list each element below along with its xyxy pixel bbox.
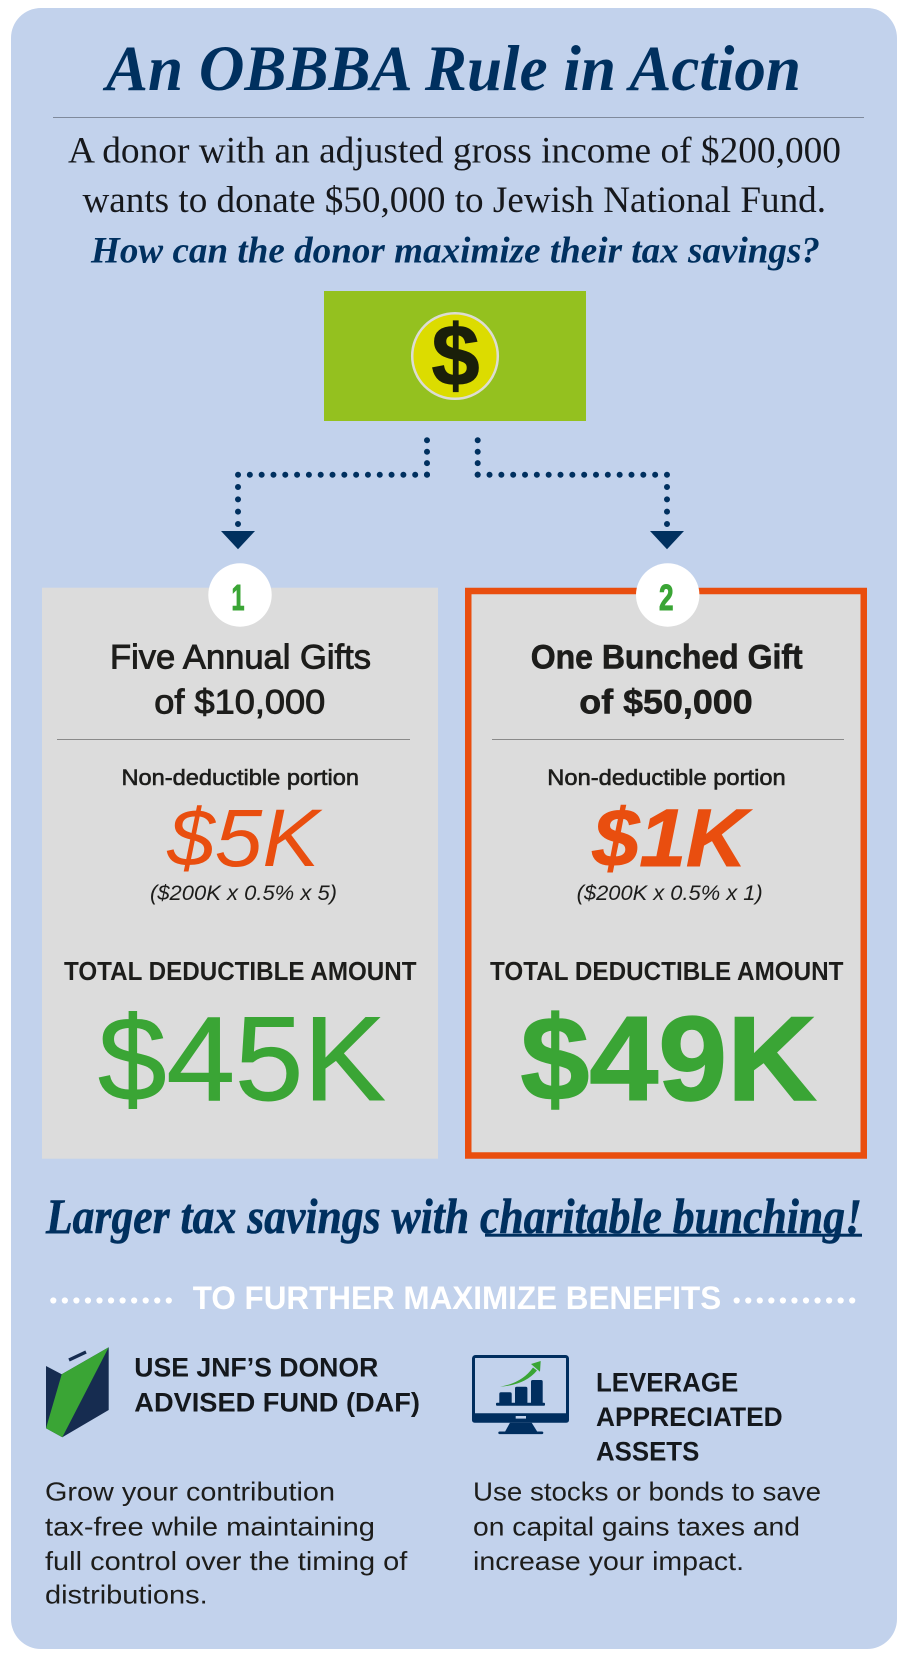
- heading: five annual gifts: of $10,000: [154, 683, 325, 721]
- heading: one bunched gift: [531, 638, 803, 721]
- intro text: wants to donate $50,000 to Jewish National Fund.: [82, 180, 826, 221]
- text: DAF description: full control over the timing of: [45, 1546, 408, 1576]
- title: An OBBBA Rule in Action: [102, 33, 801, 105]
- heading: five annual gifts: [110, 638, 371, 721]
- label: total deductible amount: TOTAL DEDUCTIBLE AMOUNT: [490, 958, 844, 986]
- value: $1K: $1K: [592, 793, 753, 884]
- text: DAF description: tax-free while maintaining: [45, 1511, 375, 1541]
- label: non-deductible portion: Non-deductible portion: [122, 765, 359, 790]
- text: appreciated assets description: Use stocks or bonds to save: [473, 1477, 821, 1507]
- label: non-deductible portion: Non-deductible portion: [547, 765, 786, 790]
- heading: leverage appreciated assets: ASSETS: [596, 1436, 699, 1466]
- badge 1: [208, 563, 272, 627]
- heading: use JNF's donor advised fund: USE JNF’S DONOR: [134, 1353, 378, 1383]
- icon: dollar bill: [324, 291, 586, 421]
- intro text: A donor with an adjusted gross income of $200,000: [68, 130, 841, 172]
- heading: use JNF's donor advised fund: ADVISED FUND (DAF): [134, 1388, 420, 1418]
- badge 1: 1: [232, 577, 244, 618]
- panel: option 1: [42, 563, 438, 1159]
- formula: ($200K x 0.5% x 5): [150, 882, 337, 905]
- heading: one bunched gift: One Bunched Gift: [531, 638, 803, 676]
- badge 2: 2: [659, 577, 674, 618]
- value: $49K: $49K: [520, 992, 816, 1126]
- icon: dollar bill: $: [432, 308, 479, 404]
- question: How can the donor maximize their tax savings?: [90, 230, 820, 272]
- formula: ($200K x 0.5% x 1): [577, 882, 763, 905]
- badge 2: [636, 563, 699, 627]
- panel: option 2: [468, 563, 864, 1156]
- value: $45K: $45K: [98, 992, 385, 1126]
- heading: leverage appreciated assets: APPRECIATED: [596, 1402, 783, 1432]
- value: $5K: $5K: [166, 793, 323, 884]
- text: appreciated assets description: increase your impact.: [473, 1546, 744, 1576]
- subheading: to further maximize benefits: TO FURTHER MAXIMIZE BENEFITS: [193, 1280, 721, 1316]
- text: DAF description: distributions.: [45, 1580, 208, 1610]
- intro text: [68, 130, 841, 221]
- arrow: left dotted path: [221, 440, 427, 549]
- heading: five annual gifts: Five Annual Gifts: [110, 638, 371, 676]
- heading: leverage appreciated assets: LEVERAGE: [596, 1368, 738, 1398]
- arrow: right dotted path: [478, 440, 684, 549]
- heading: use JNF's donor advised fund: [134, 1353, 420, 1418]
- label: total deductible amount: TOTAL DEDUCTIBLE AMOUNT: [64, 958, 417, 986]
- text: appreciated assets description: [473, 1477, 821, 1576]
- text: DAF description: [45, 1477, 408, 1610]
- text: appreciated assets description: on capital gains taxes and: [473, 1511, 800, 1541]
- heading: leverage appreciated assets: [596, 1368, 783, 1466]
- icon: donor advised fund book: [46, 1347, 109, 1437]
- heading: one bunched gift: of $50,000: [579, 683, 753, 721]
- text: DAF description: Grow your contribution: [45, 1477, 335, 1507]
- icon: monitor with chart: [472, 1356, 569, 1434]
